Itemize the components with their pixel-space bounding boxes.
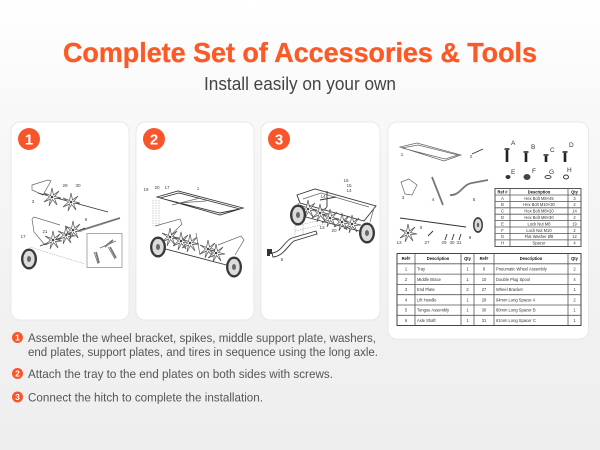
table: parts list: Description <box>427 256 450 261</box>
diagram: step 3 hitch connection: 20 <box>331 228 337 233</box>
panel: step 3 <box>261 122 380 320</box>
table: parts list: Description <box>520 256 543 261</box>
diagram: step 1 axle assembly: 6 <box>85 217 88 222</box>
diagram: parts illustrations: 2 <box>470 154 473 159</box>
badge: step 1 <box>18 128 40 150</box>
table: hardware list: Flat Washer Ø8 <box>525 234 554 239</box>
table: parts list: 1 <box>466 277 469 282</box>
table: hardware list: Hex Bolt M8×20 <box>524 209 554 214</box>
table: parts list: 2 <box>405 277 408 282</box>
table: parts list: 2 <box>573 297 576 302</box>
table: hardware list: 4 <box>573 241 576 246</box>
diagram: hardware icons <box>504 140 574 180</box>
table: parts list: 4 <box>573 277 576 282</box>
table: hardware list: B <box>501 202 504 207</box>
table: parts list: Lift Handle <box>417 297 437 302</box>
table: hardware list: 19 <box>572 221 577 226</box>
table: parts list: 1 <box>405 266 408 272</box>
table: parts list: 27 <box>482 287 487 292</box>
table: hardware list: A <box>501 196 504 201</box>
subtitle: Install easily on your own <box>204 74 396 94</box>
table: hardware list: 2 <box>573 202 576 207</box>
diagram: step 3 hitch connection: 5 <box>281 257 284 262</box>
table: parts list: Qty <box>464 256 472 261</box>
table: parts list: 4 <box>405 297 408 302</box>
table: parts list: Middle Brace <box>417 277 442 282</box>
badge: step 2: 2 <box>150 132 158 148</box>
table: hardware list: Hex Bolt M8×30 <box>524 215 554 220</box>
badge: step 3 <box>268 128 290 150</box>
diagram: hardware icons: F <box>532 168 536 175</box>
diagram: step 1 axle assembly: 29 <box>62 183 68 188</box>
table: hardware list: G <box>501 234 504 239</box>
diagram: hardware icons: B <box>531 144 535 151</box>
table: hardware list: Lock Nut M10 <box>526 228 552 233</box>
table: parts list: 10 <box>482 277 487 282</box>
diagram: step 3 hitch connection: 13 <box>319 225 325 230</box>
table: parts list <box>397 254 581 326</box>
table: parts list: End Plate <box>417 287 435 292</box>
table: hardware list: Lock Nut M8 <box>528 221 551 226</box>
diagram: step 3 hitch connection <box>267 178 376 262</box>
table: parts list: 3 <box>405 287 408 292</box>
table: parts list: 1 <box>466 318 469 323</box>
table: parts list: 31 <box>482 318 487 323</box>
table: parts list: 94mm Long Spacer A <box>496 297 536 302</box>
table: parts list: Tray <box>417 266 426 272</box>
diagram: parts illustrations: 29 <box>441 240 447 245</box>
panel: step 2 <box>136 122 254 320</box>
diagram: step 2 tray attachment <box>143 185 244 278</box>
table: parts list: 1 <box>573 308 576 313</box>
diagram: parts illustrations: 30 <box>449 240 455 245</box>
table: hardware list: H <box>501 241 504 246</box>
diagram: step 3 hitch connection: 15 <box>346 183 352 188</box>
table: hardware list: 14 <box>572 209 577 214</box>
diagram: step 2 tray attachment: 19 <box>143 187 149 192</box>
diagram: parts illustrations: 13 <box>396 240 402 245</box>
diagram: step 1 axle assembly: 17 <box>20 234 26 239</box>
diagram: parts illustrations: 31 <box>456 240 462 245</box>
table: hardware list <box>495 188 581 246</box>
instruction 3: Connect the hitch to complete the installation. <box>28 390 263 404</box>
table: parts list: Pneumatic Wheel Assembly <box>496 266 548 272</box>
table: parts list: 29 <box>482 297 487 302</box>
instruction 1: end plates, support plates, and tires in sequence using the long axle. <box>28 345 378 359</box>
table: parts list: 2 <box>573 266 576 272</box>
diagram: step 2 tray attachment: 20 <box>154 185 160 190</box>
diagram: hardware icons: D <box>569 142 574 149</box>
instruction 2: Attach the tray to the end plates on both sides with screws. <box>28 367 333 381</box>
diagram: step 2 tray attachment: 17 <box>164 185 170 190</box>
instruction 1: 1 <box>15 332 20 342</box>
diagram: parts illustrations: 1 <box>401 152 404 157</box>
diagram: parts illustrations: 5 <box>473 197 476 202</box>
table: hardware list: 3 <box>573 196 576 201</box>
diagram: parts illustrations: 27 <box>424 240 430 245</box>
table: hardware list: Spacer <box>533 241 546 246</box>
diagram: parts illustrations: 3 <box>402 195 405 200</box>
diagram: step 1 axle assembly <box>20 180 122 270</box>
table: parts list: 30 <box>482 308 487 313</box>
table: parts list: Tongue Assembly <box>417 308 450 313</box>
table: parts list: 1 <box>466 308 469 313</box>
badge: step 1: 1 <box>25 132 33 148</box>
instruction 3: 3 <box>15 392 20 402</box>
diagram: step 1 axle assembly: 21 <box>42 229 48 234</box>
diagram: step 1 axle assembly: 30 <box>75 183 81 188</box>
diagram: parts illustrations <box>396 143 488 245</box>
diagram: parts illustrations: 4 <box>432 197 435 202</box>
table: hardware list: C <box>501 209 504 214</box>
table: hardware list: D <box>501 215 504 220</box>
table: parts list: 1 <box>466 297 469 302</box>
instruction 1 <box>12 331 378 359</box>
diagram: hardware icons: C <box>550 147 555 154</box>
table: parts list: 8 <box>483 266 486 272</box>
table: parts list: Qty <box>571 256 579 261</box>
table: parts list: Axle Shaft <box>417 318 437 323</box>
diagram: step 2 tray attachment: 1 <box>197 186 200 191</box>
panel: step 1 <box>11 122 129 320</box>
table: parts list: Ref# <box>402 256 411 261</box>
diagram: hardware icons: A <box>511 140 516 147</box>
table: parts list: 61mm Long Spacer C <box>496 318 536 323</box>
table: parts list: 1 <box>573 287 576 292</box>
table: hardware list: Qty <box>571 190 579 194</box>
table: hardware list: Description <box>528 190 551 194</box>
diagram: parts illustrations: 6 <box>420 225 423 230</box>
instruction 1: Assemble the wheel bracket, spikes, middle support plate, washers, <box>28 331 376 345</box>
table: hardware list: F <box>501 228 504 233</box>
diagram: hardware icons: H <box>567 167 572 174</box>
diagram: step 3 hitch connection: 14 <box>346 188 352 193</box>
table: hardware list: 2 <box>573 228 576 233</box>
diagram: parts illustrations: 8 <box>469 235 472 240</box>
table: hardware list: 2 <box>573 215 576 220</box>
diagram: step 3 hitch connection: 14 <box>320 194 326 199</box>
table: parts list: 5 <box>405 308 408 313</box>
diagram: hardware icons: E <box>511 169 516 176</box>
instruction 2: 2 <box>15 368 20 378</box>
diagram: step 3 hitch connection: 16 <box>343 178 349 183</box>
table: parts list: 1 <box>466 266 469 272</box>
diagram: hardware icons: G <box>549 169 554 176</box>
title: Complete Set of Accessories & Tools <box>63 37 537 68</box>
table: hardware list: Ref # <box>497 190 508 194</box>
badge: step 3: 3 <box>275 132 283 148</box>
table: parts list: 2 <box>466 287 469 292</box>
table: parts list: Ref# <box>480 256 489 261</box>
table: parts list: Double Plug Spool <box>496 277 530 282</box>
panel: parts overview <box>388 122 588 339</box>
table: parts list: 6 <box>405 318 408 323</box>
table: hardware list: Hex Bolt M8×45 <box>524 196 554 201</box>
table: hardware list: 12 <box>572 234 577 239</box>
table: parts list: 1 <box>573 318 576 323</box>
diagram: step 1 axle assembly: 3 <box>32 199 35 204</box>
table: hardware list: Hex Bolt M10×30 <box>523 202 555 207</box>
badge: step 2 <box>143 128 165 150</box>
table: parts list: 80mm Long Spacer B <box>496 308 536 313</box>
table: hardware list: E <box>501 221 504 226</box>
table: parts list: Wheel Bracket <box>496 287 523 292</box>
